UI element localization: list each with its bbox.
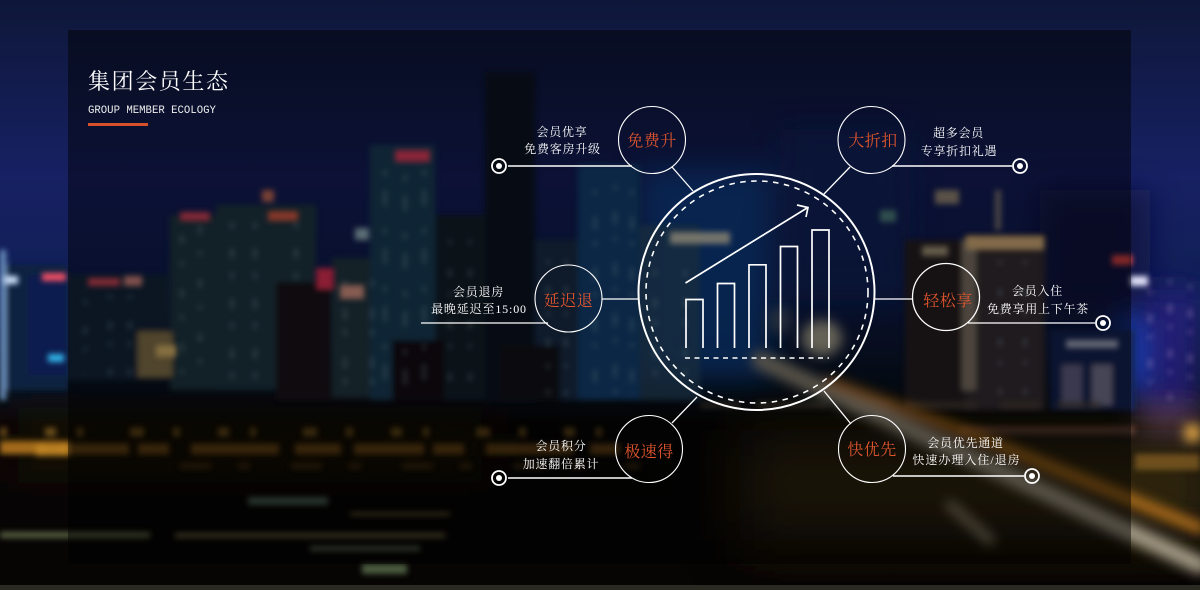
node: 轻松享 — [912, 264, 1110, 330]
outer ring — [638, 174, 874, 410]
node: 快优先: 会员优先通道 — [927, 435, 1004, 450]
node: 延迟退: 会员退房 — [453, 284, 504, 299]
building windows — [85, 170, 1190, 400]
node: 极速得: 加速翻倍累计 — [523, 456, 599, 471]
node: 极速得: 极速得 — [624, 442, 674, 461]
node: 极速得: 会员积分 — [535, 438, 587, 453]
title: 集团会员生态 — [88, 69, 230, 94]
node: 快优先: 快速办理入住/退房 — [912, 452, 1021, 467]
node: 延迟退: 延迟退 — [544, 292, 593, 310]
node: 极速得 — [492, 416, 682, 485]
node: 大折扣: 大折扣 — [848, 132, 898, 150]
node: 大折扣: 超多会员 — [933, 125, 984, 140]
subtitle: GROUP MEMBER ECOLOGY — [88, 105, 217, 117]
connectors between hub and nodes — [602, 167, 913, 424]
node: 快优先: 快优先 — [847, 441, 897, 459]
buildings — [0, 72, 1135, 410]
node: 大折扣: 专享折扣礼遇 — [921, 143, 997, 158]
node: 免费升 — [492, 106, 686, 174]
inner dashed ring — [646, 181, 868, 403]
node: 大折扣 — [838, 106, 1027, 174]
road and ground streaks — [0, 497, 450, 574]
node: 轻松享: 会员入住 — [1012, 284, 1063, 298]
title accent underline — [88, 123, 148, 126]
warm ground haze — [0, 425, 1200, 540]
node: 延迟退: 最晚延迟至15:00 — [431, 302, 527, 316]
dashed baseline — [685, 357, 829, 359]
node: 轻松享: 免费享用上下午茶 — [987, 301, 1089, 316]
horizon lights — [0, 405, 1200, 466]
node: 轻松享: 轻松享 — [923, 292, 973, 310]
node: 免费升: 免费客房升级 — [524, 141, 601, 156]
central chart medallion — [638, 174, 874, 410]
growth arrow — [686, 205, 808, 283]
node: 快优先 — [838, 416, 1039, 483]
node: 免费升: 会员优享 — [536, 124, 588, 139]
node: 免费升: 免费升 — [627, 132, 677, 150]
central bright glow — [768, 306, 1200, 441]
bar chart — [686, 230, 829, 348]
node: 延迟退 — [421, 265, 602, 332]
